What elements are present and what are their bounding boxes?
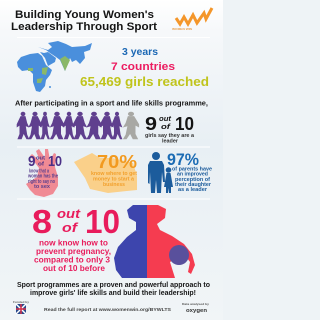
stat: 9 out of 10 leaders: 9 [145,113,157,134]
silhouette: pregnant girl, red half [147,205,195,278]
stat: 8 out of 10: out [57,206,81,221]
funder: UK flag [13,300,30,314]
title [11,9,157,33]
pregnancy text [34,238,111,273]
stat: right to say no: right to say no [28,179,56,185]
silhouette: pregnant girl, blue half [114,205,147,278]
stat: 70%: business [103,182,125,188]
stat: 97%: an improved [177,172,208,178]
stat: right to say no: to sex [34,184,50,190]
stat: 9 out of 10 leaders: out [159,114,172,123]
stats: 3 years [122,46,158,58]
icon: ball [169,245,189,265]
conclusion: improve girls' life skills and build their leadership! [30,290,196,297]
stat: 9 out of 10 leaders: of [161,122,172,131]
stat: 9 out of 10 leaders: girls say they are a [145,133,194,139]
stat: right to say no: of [38,162,44,168]
logo: Women Win [172,8,212,31]
stat: 9 out of 10 leaders: leader [162,138,178,144]
logo: Women Win: WOMEN WIN [172,27,192,31]
stat: 70%: money to start a [93,176,135,182]
stat: 70% [91,151,137,188]
stats: 65,469 girls reached [80,74,209,89]
stat: right to say no: know that a [29,168,49,174]
stat: right to say no [27,153,62,190]
stat: 8 out of 10: of [62,220,79,235]
stats [80,46,209,89]
conclusion [17,282,210,297]
pregnancy text: compared to only 3 [34,254,110,264]
stats: 7 countries [111,61,175,73]
stat: 70%: 70% [97,151,137,172]
conclusion: Sport programmes are a proven and powerful approach to [17,282,210,289]
data credit: Data analysed by [182,302,209,306]
stat: 97%: their daughter [175,182,212,188]
pregnancy text: prevent pregnancy, [36,246,111,256]
icon: pink hand [26,149,58,197]
title: Leadership Through Sport [11,21,157,33]
stat: right to say no: woman has the [27,174,58,180]
funder: UK flag: Funded by [13,300,30,304]
pregnancy text: out of 10 before [43,263,105,273]
stat: 8 out of 10: 10 [85,203,120,240]
stat: 8 out of 10 [32,203,120,240]
stat: right to say no: out [36,156,45,162]
report link: Read the full report at www.womenwin.org/BYWLTS [44,307,171,312]
stat: 9 out of 10 leaders: 10 [175,113,194,134]
page background [0,0,223,320]
pregnancy text: now know how to [39,238,108,248]
data credit [182,302,209,314]
title: Building Young Women's [15,9,154,21]
stat: right to say no: 9 [28,153,36,170]
stat: 97% [167,151,212,193]
data credit: oxygen [186,308,207,314]
stat: 97%: 97% [167,151,199,169]
icon: parent and daughter [148,152,173,193]
intro sentence: After participating in a sport and life skills programme, [15,98,208,108]
icon: hand holding money [74,153,137,193]
map of Africa and Asia [17,41,92,92]
row of girl silhouettes [17,112,139,139]
stat: 97%: as a leader [178,187,208,193]
stat: 9 out of 10 leaders [145,113,194,144]
stat: 70%: know where to get [91,171,137,177]
stat: 8 out of 10: 8 [32,203,52,240]
stat: 97%: of parents have [172,166,212,172]
stat: 97%: perception of [175,177,210,183]
stat: right to say no: 10 [48,153,62,170]
